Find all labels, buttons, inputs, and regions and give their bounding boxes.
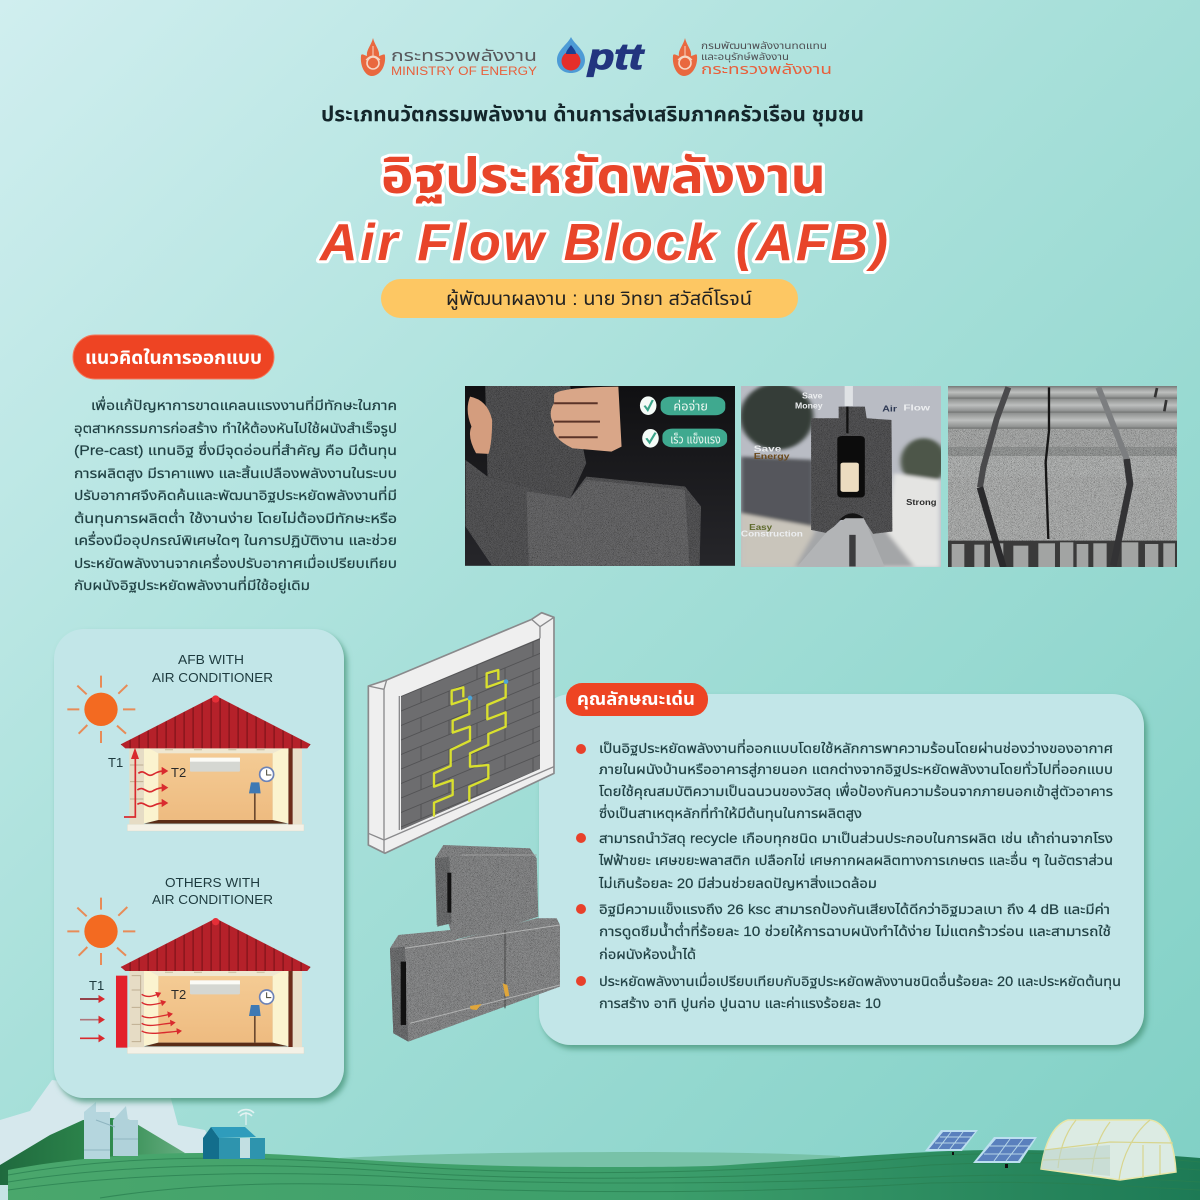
feature 3: การดูดซึมน้ำต่ำที่ร้อยละ 10 ช่วยให้การฉาบผนังทำได้ง่าย ไม่แตกร้าวร่อน และสามารถใช้ [599,922,1111,940]
label: T1 bottom: T1 [89,978,104,993]
icon: silos [84,1102,138,1159]
icon: blue greenhouse [203,1110,265,1159]
photo: block cross section: Air [882,405,897,414]
label: others with air conditioner [152,875,273,907]
feature 1 [576,739,1113,822]
logo: department of alternative energy: กระทรวงพลังงาน [701,61,832,77]
logo: ministry of energy: กระทรวงพลังงาน [391,48,537,65]
icon: solar panels [925,1130,1037,1168]
feature 2 [576,830,1113,891]
label: AFB with air conditioner: AIR CONDITIONER [152,670,273,685]
label: T1 top: T1 [108,755,123,770]
photo: hands holding blocks [465,386,735,566]
label: T2 bottom: T2 [171,987,186,1002]
photo: block cross section: Construction [741,530,803,539]
label: AFB with air conditioner: AFB WITH [178,652,244,667]
photo: stacked strapped blocks [945,384,1180,570]
house: AFB wall [121,695,311,831]
logo: department of alternative energy: และอนุรักษ์พลังงาน [701,51,789,63]
logo: department of alternative energy: กรมพัฒนาพลังงานทดแทน [701,40,827,52]
feature 2: สามารถนำวัสดุ recycle เกือบทุกชนิด มาเป็นส่วนประกอบในการผลิต เช่น เถ้าถ่านจากโรง [599,830,1113,847]
text: design concept paragraph: เพื่อแก้ปัญหาการขาดแคลนแรงงานที่มีทักษะในภาค [91,396,397,413]
icon: flame emblem [361,38,385,76]
feature 3 [576,901,1111,962]
feature 3: อิฐมีความแข็งแรงถึง 26 ksc สามารถป้องกันเสียงได้ดีกว่าอิฐมวลเบา ถึง 4 dB และมีค่า [599,901,1110,917]
photo: block cross section: Energy [754,453,790,462]
panel: key features [539,683,1144,1045]
text: design concept paragraph: (Pre-cast) แทนอิฐ ซึ่งมีจุดอ่อนที่สำคัญ คือ มีต้นทุน [74,441,397,459]
text: design concept paragraph: เครื่องมืออุปกรณ์พิเศษใดๆ ในการปฏิบัติงาน และช่วย [74,531,397,549]
subtitle: category: ประเภทนวัตกรรมพลังงาน ด้านการส่งเสริมภาคครัวเรือน ชุมชน [321,104,864,126]
landscape footer [0,1080,1200,1200]
wall brick face [401,638,540,830]
label: others with air conditioner: OTHERS WITH [165,875,260,890]
text: design concept paragraph: กับผนังอิฐประหยัดพลังงานที่มีใช้อยู่เดิม [74,576,310,594]
feature 4: ประหยัดพลังงานเมื่อเปรียบเทียบกับอิฐประหยัดพลังงานชนิดอื่นร้อยละ 20 และประหยัดต้นทุน [599,972,1121,990]
photo: block cross section: Flow [903,404,931,413]
photo: block cross section: Strong [906,498,936,507]
feature 4 [576,972,1121,1012]
diagram: wall with air flow [368,613,554,853]
label: T2 top: T2 [171,765,186,780]
logo: ptt: ptt [587,36,645,77]
heading: design concept [73,335,274,379]
label: AFB with air conditioner [152,652,273,685]
heat arrows and hot wall [80,976,181,1048]
photo: hands holding blocks: เร็ว แข็งแรง [670,432,721,447]
photo: block cross section: Easy [749,523,772,532]
feature 1: ภายในผนังบ้านหรืออาคารสู่ภายนอก แตกต่างจากอิฐประหยัดพลังงานโดยทั่วไปที่ออกแบบ [599,760,1113,778]
label: others with air conditioner: AIR CONDITIONER [152,892,273,907]
icon: white greenhouse [1041,1120,1176,1180]
photo: hands holding blocks: ค่อจ่าย [673,399,708,414]
text: design concept paragraph: การผลิตสูง มีราคาแพง และสิ้นเปลืองพลังงานในระบบ [74,465,397,482]
feature 3: ก่อผนังห้องน้ำได้ [599,945,696,962]
text: design concept paragraph: ต้นทุนการผลิตต่ำ ใช้งานง่าย โดยไม่ต้องมีทักษะหรือ [74,509,397,527]
developer pill: ผู้พัฒนาผลงาน : นาย วิทยา สวัสดิ์โรจน์ [446,287,752,311]
logo: ministry of energy [361,38,537,78]
logo: ptt [557,36,645,77]
logo: department of alternative energy [673,38,832,77]
air flow paths [434,670,508,817]
feature 2: ไฟฟ้าขยะ เศษขยะพลาสติก เปลือกไข่ เศษกากผลผลิตทางการเกษตร และอื่น ๆ ในอัตราส่วน [598,851,1113,868]
panel: comparison [54,629,344,1098]
icon: sun bottom [67,898,135,965]
feature 2: ไม่เกินร้อยละ 20 มีส่วนช่วยลดปัญหาสิ่งแวดล้อม [598,875,877,891]
feature 1: ซึ่งเป็นสาเหตุหลักที่ทำให้มีต้นทุนในการผลิตสูง [599,804,862,822]
photo: block cross section: Save [802,392,823,401]
text: design concept paragraph: อุตสาหกรรมการก่อสร้าง ทำให้ต้องหันไปใช้ผนังสำเร็จรูป [74,420,397,437]
photo: two concrete blocks [390,845,560,1042]
logo: ministry of energy: MINISTRY OF ENERGY [391,66,537,78]
title: English: Air Flow Block (AFB) [318,214,888,272]
photo: block cross section: Money [795,402,823,411]
icon: flame emblem [673,38,697,76]
photo: block cross section [740,383,947,567]
heading: design concept: แนวคิดในการออกแบบ [85,348,262,369]
house: conventional wall [121,918,311,1054]
title: Thai: อิฐประหยัดพลังงาน [381,148,826,204]
feature 4: การสร้าง อาทิ ปูนก่อ ปูนฉาบ และค่าแรงร้อยละ 10 [599,995,881,1012]
feature 1: โดยใช้คุณสมบัติความเป็นฉนวนของวัสดุ เพื่อป้องกันความร้อนจากภายนอกเข้าสู่ตัวอาคาร [599,782,1113,800]
developer pill [381,279,798,318]
photo: block cross section: Save [754,445,782,454]
text: design concept paragraph [74,396,397,594]
heading: key features [566,683,708,716]
text: design concept paragraph: ประหยัดพลังงานจากเครื่องปรับอากาศเมื่อเปรียบเทียบ [74,554,397,571]
text: design concept paragraph: ปรับอากาศจึงคิดค้นและพัฒนาอิฐประหยัดพลังงานที่มี [74,486,397,503]
heading: key features: คุณลักษณะเด่น [577,689,695,710]
icon: sun top [67,676,135,743]
feature 1: เป็นอิฐประหยัดพลังงานที่ออกแบบโดยใช้หลักการพาความร้อนโดยผ่านช่องว่างของอากาศ [599,739,1113,756]
